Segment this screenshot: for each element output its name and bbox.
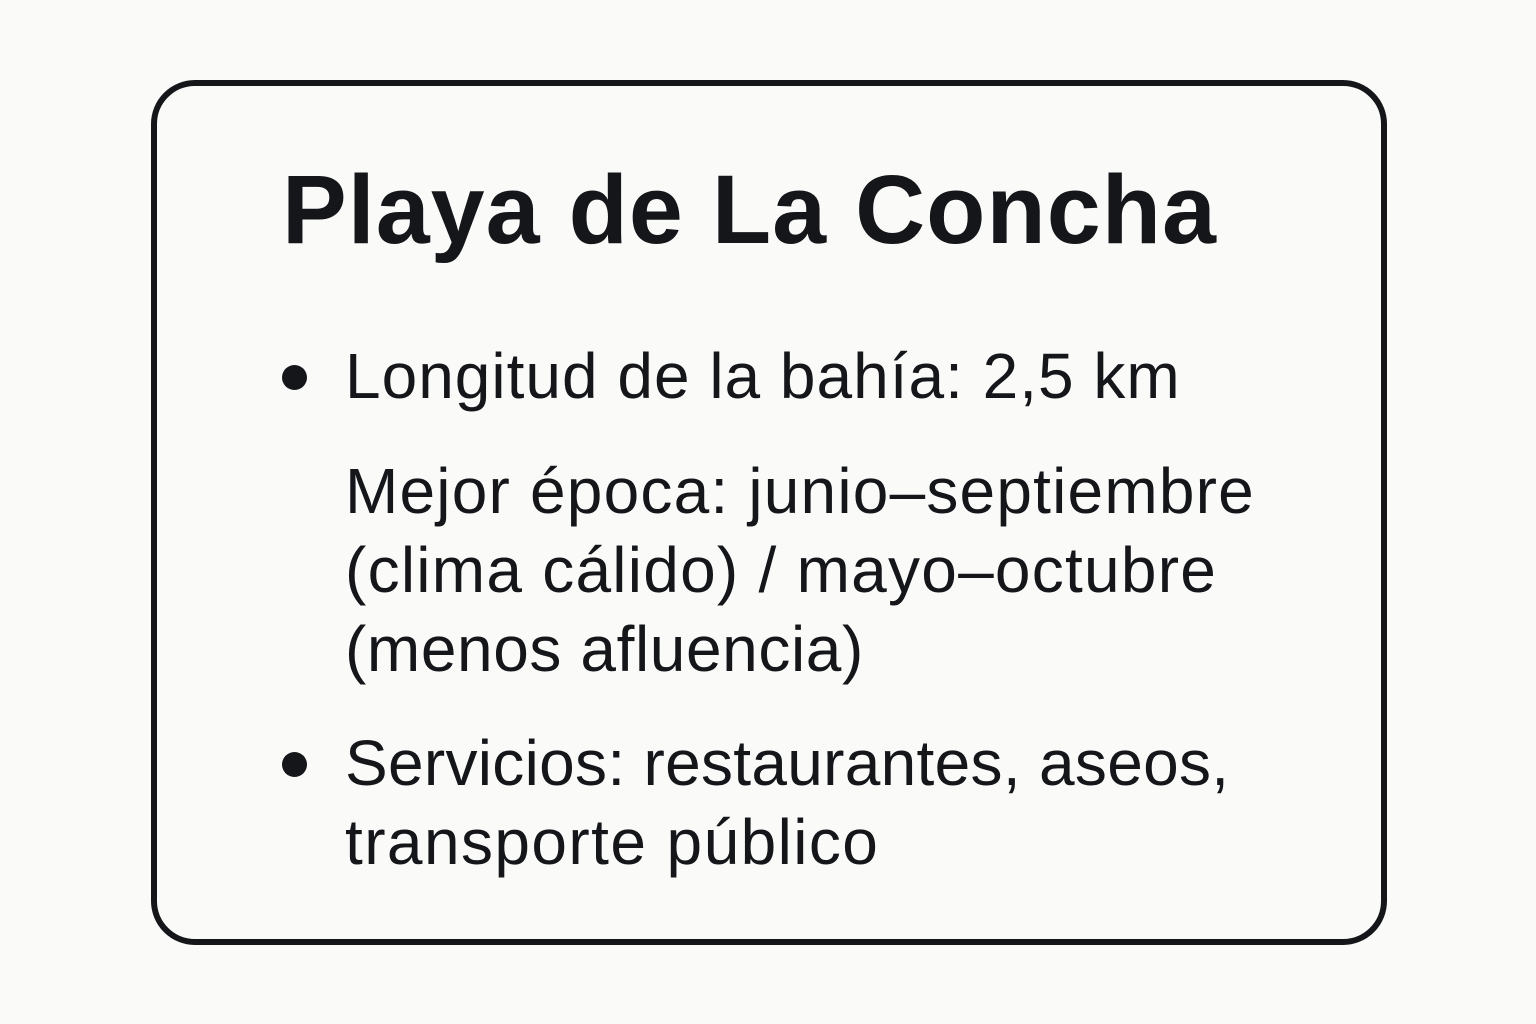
title: Playa de La Concha	[282, 155, 1217, 264]
text: best season	[345, 455, 1255, 685]
text: services	[345, 727, 1229, 878]
text: best season: (menos afluencia)	[345, 613, 864, 685]
text: bay length: Longitud de la bahía: 2,5 km	[345, 340, 1181, 412]
bullet: length	[282, 365, 307, 390]
text: services: transporte público	[345, 806, 879, 878]
text: best season: (clima cálido) / mayo–octubre	[345, 534, 1217, 606]
text: best season: Mejor época: junio–septiembre	[345, 455, 1255, 527]
bullet: services	[282, 752, 307, 777]
panel: info card	[151, 80, 1387, 945]
text: services: Servicios: restaurantes, aseos,	[345, 727, 1229, 799]
